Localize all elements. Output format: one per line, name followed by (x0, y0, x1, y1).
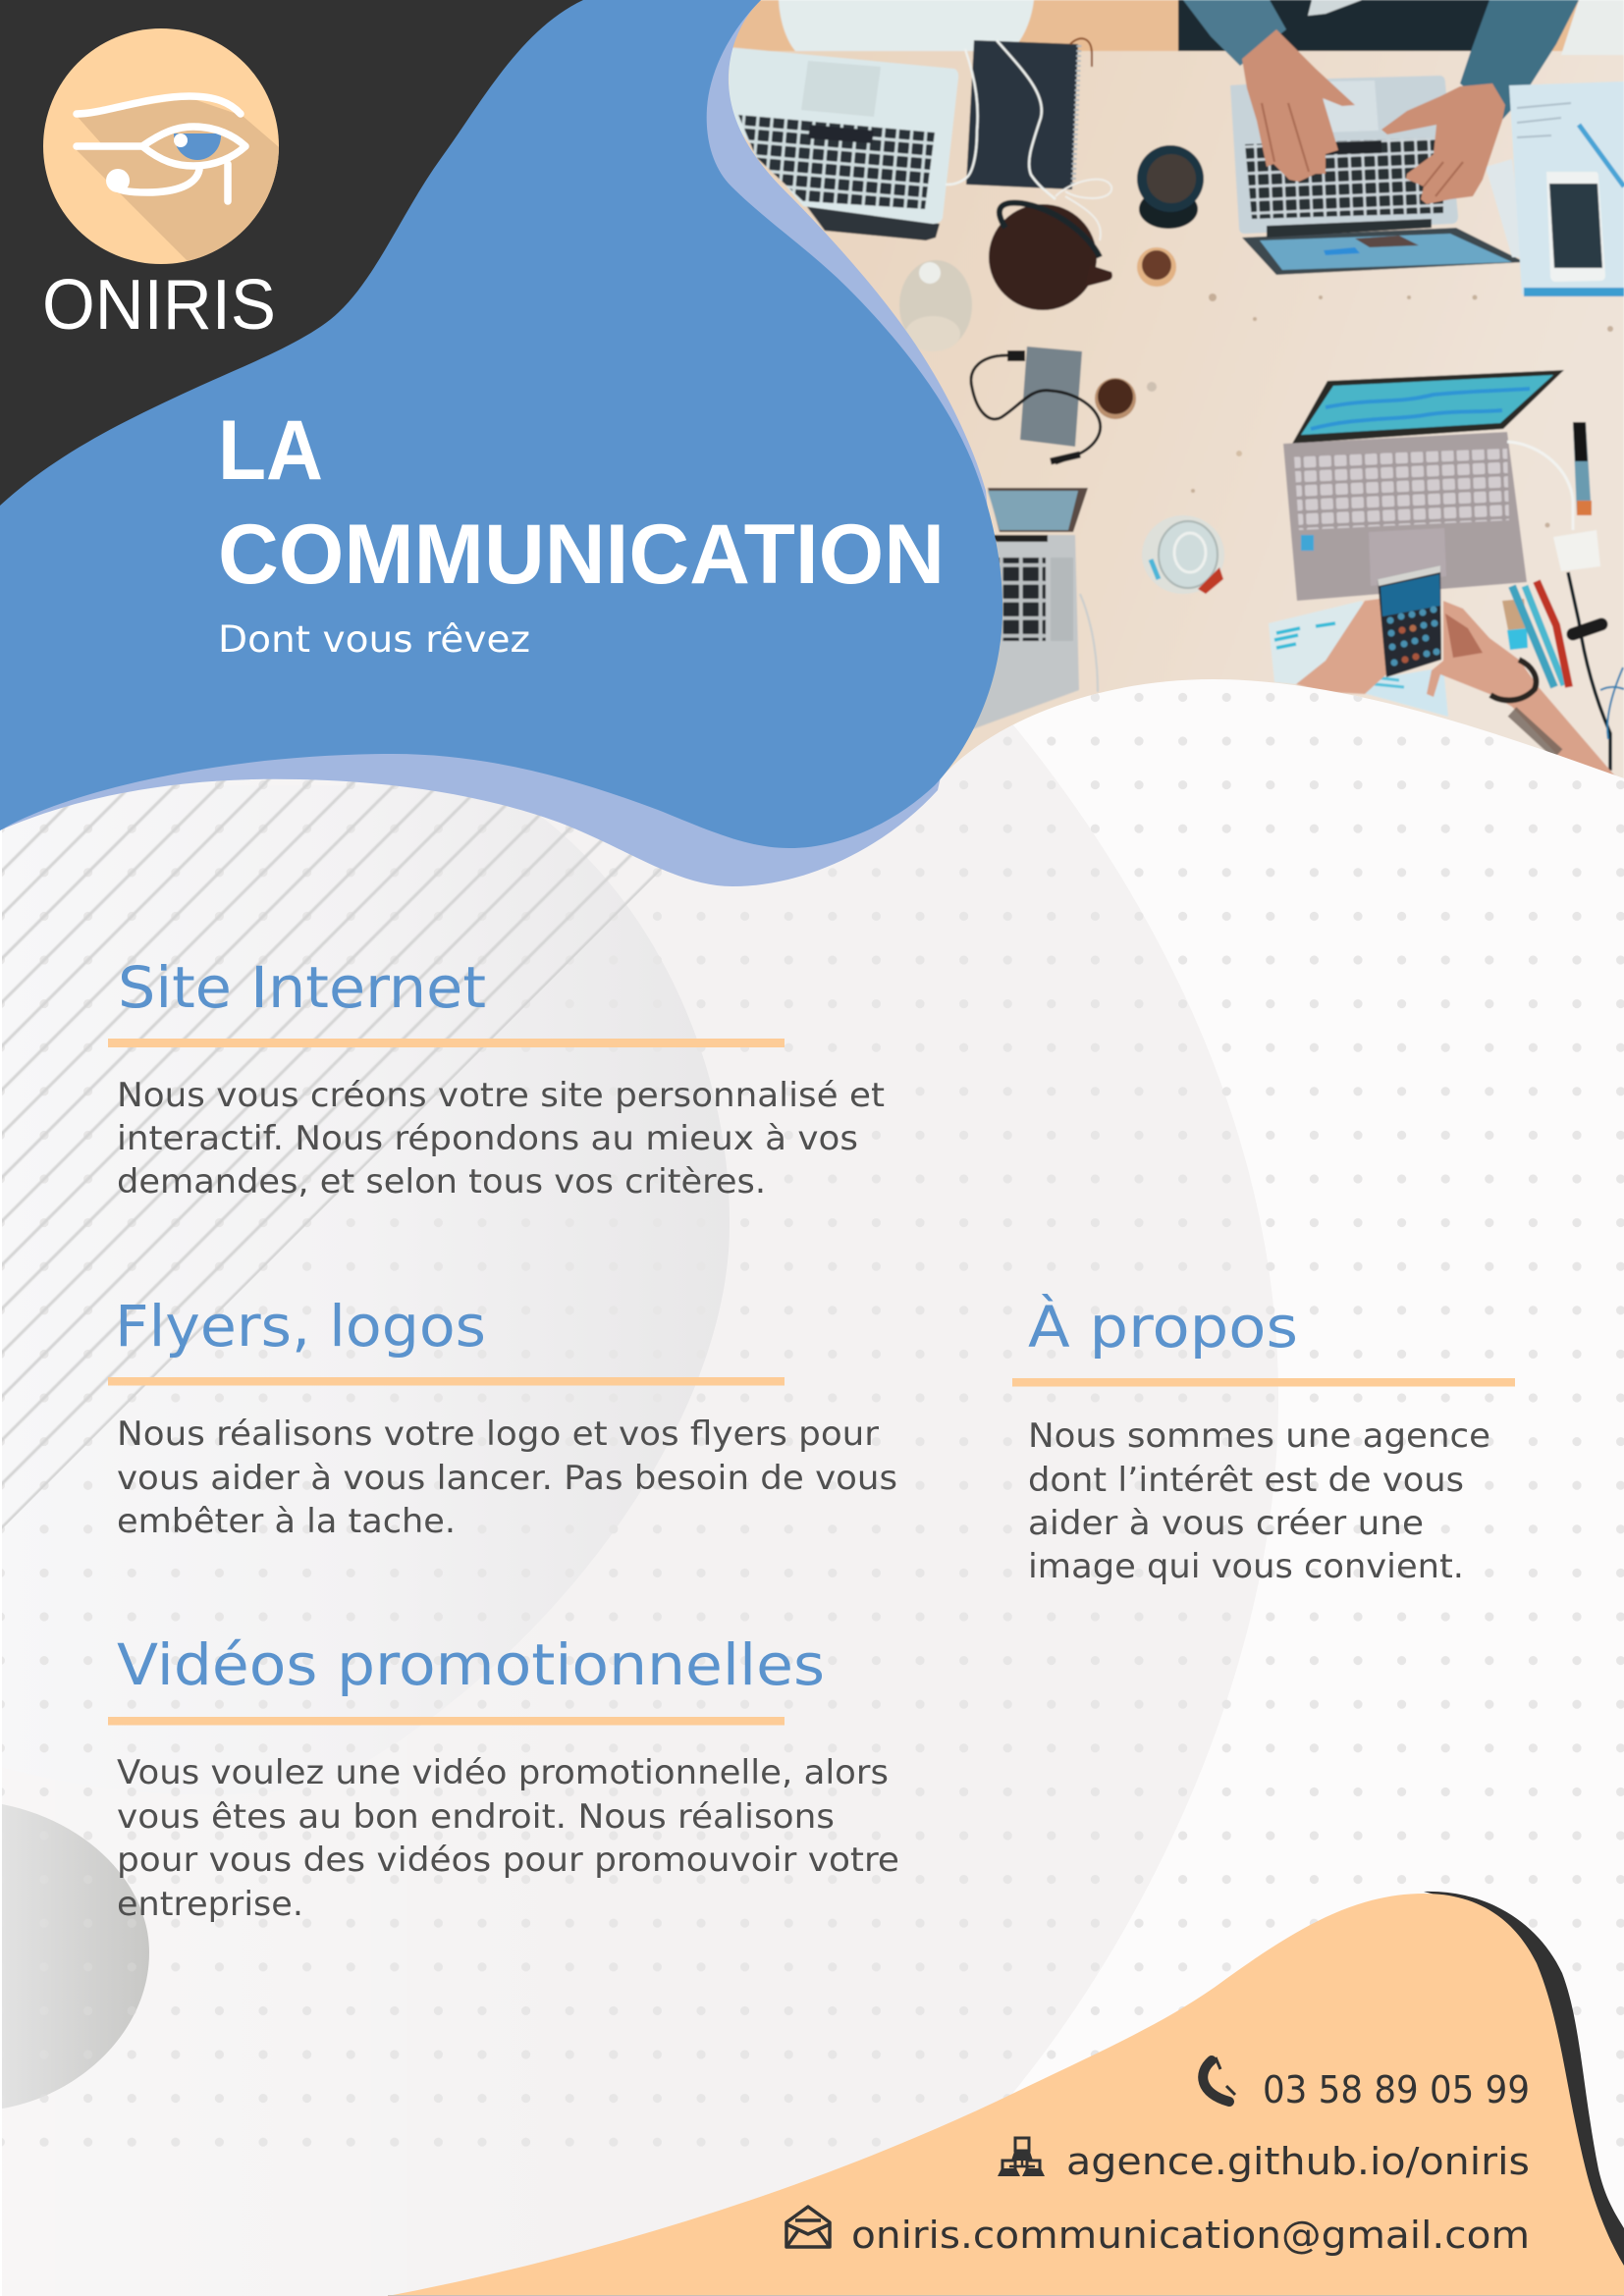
contact blob (388, 1894, 1624, 2296)
bottom hairline (388, 2295, 1624, 2296)
section: Vidéos promotionnelles: entreprise. (117, 1885, 303, 1924)
page background with wave top (2, 679, 1624, 2296)
section: Site Internet: Site Internet (118, 954, 486, 1021)
photo: power bank and cable (971, 347, 1101, 463)
white right-hand area (947, 679, 1624, 800)
photo: white laptop (729, 47, 958, 240)
section: Flyers, logos (108, 1293, 897, 1541)
subtitle: Dont vous rêvez (218, 618, 530, 661)
icon: network (998, 2138, 1045, 2176)
photo: water bottle (899, 260, 972, 351)
section: Site Internet: Nous vous créons votre site personnalisé et (117, 1076, 885, 1115)
photo: glass jar (1142, 515, 1224, 594)
website: agence.github.io/oniris (1066, 2140, 1530, 2183)
photo: notebook and earphones (946, 38, 1111, 240)
logo: wordmark: ONIRIS (42, 266, 276, 345)
section: Vidéos promotionnelles: Vidéos promotionnelles (117, 1631, 825, 1698)
section: Vidéos promotionnelles: vous êtes au bon endroit. Nous réalisons (117, 1797, 835, 1837)
left white edge (0, 825, 2, 2296)
section: Site Internet (108, 954, 885, 1201)
section: Site Internet: interactif. Nous répondons au mieux à vos (117, 1119, 858, 1158)
dot grid (0, 677, 1624, 2164)
photo: typing hands (1242, 29, 1505, 204)
section: Flyers, logos: vous aider à vous lancer. Pas besoin de vous (117, 1459, 897, 1498)
photo: desk with laptops seen from above (687, 0, 1624, 800)
photo: silver laptop under the title (967, 488, 1098, 731)
left lightening (0, 589, 609, 2296)
section: Flyers, logos: embêter à la tache. (117, 1502, 456, 1541)
title (218, 403, 945, 661)
email: oniris.communication@gmail.com (851, 2214, 1530, 2257)
diagonal line pattern (2, 779, 662, 1529)
logo: eye of Horus (77, 96, 245, 201)
section: Vidéos promotionnelles (108, 1631, 899, 1924)
section: À propos: Nous sommes une agence (1028, 1416, 1490, 1456)
main blue blob (0, 0, 1002, 848)
icon: telephone (1203, 2057, 1235, 2102)
section: Vidéos promotionnelles: pour vous des vidéos pour promouvoir votre (117, 1841, 899, 1880)
section: Flyers, logos: Nous réalisons votre logo et vos flyers pour (117, 1415, 879, 1454)
light blue blob accent (0, 0, 992, 886)
icon: envelope (786, 2207, 830, 2247)
section: À propos: aider à vous créer une (1028, 1504, 1424, 1543)
section: Flyers, logos: Flyers, logos (115, 1293, 486, 1360)
grey half circle bottom left (2, 1804, 149, 2109)
photo: top strip behind the desk (687, 0, 1624, 120)
title: COMMUNICATION (218, 507, 945, 602)
dark crescent behind contact blob (1424, 1892, 1624, 2277)
photo: typing laptop (1230, 76, 1525, 275)
section: Site Internet: demandes, et selon tous vos critères. (117, 1162, 766, 1201)
photo: papers and smartphone on the right (1486, 81, 1624, 296)
photo: paper, pens, marker and cables (1269, 422, 1624, 771)
grey circle shape (597, 870, 730, 1551)
photo: wood knots (1147, 294, 1613, 528)
section: À propos: dont l’intérêt est de vous (1028, 1461, 1464, 1500)
phone number: 03 58 89 05 99 (1263, 2068, 1530, 2111)
section: À propos: image qui vous convient. (1028, 1547, 1464, 1586)
photo: grey laptop with blue chart (1283, 370, 1564, 601)
logo: circle (43, 28, 279, 264)
dots over half circle (2, 1804, 149, 2109)
photo: brown cup (1095, 378, 1136, 419)
photo: teapot (989, 203, 1112, 310)
logo: long shadow (77, 100, 279, 261)
title: LA (218, 403, 323, 498)
off-white large curved shape (476, 724, 1278, 2275)
photo: black tea infuser (1137, 145, 1204, 229)
photo: hands holding a smartphone (1296, 565, 1617, 778)
section: À propos: À propos (1028, 1293, 1298, 1361)
photo: small cup (1137, 247, 1176, 287)
contact details (786, 2057, 1530, 2257)
dark top-left corner (0, 0, 687, 589)
logo (43, 28, 279, 330)
section: À propos (1012, 1293, 1515, 1586)
section: Vidéos promotionnelles: Vous voulez une vidéo promotionnelle, alors (117, 1753, 889, 1792)
